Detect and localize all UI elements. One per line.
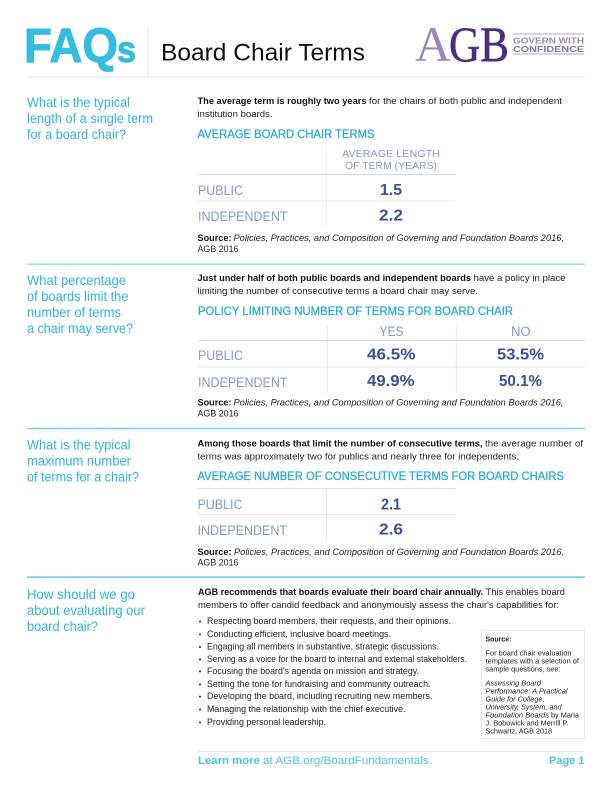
source box — [482, 630, 584, 738]
title: FAQs: s — [117, 29, 136, 70]
bullet list: evaluation capabilities: Developing the board, including recruiting new members. — [207, 691, 432, 701]
source 2: AGB 2016 — [198, 409, 239, 419]
source box: Foundation Boards — [486, 711, 549, 720]
chart heading 2: POLICY LIMITING NUMBER OF TERMS FOR BOARD CHAIR — [198, 305, 513, 318]
answer text 1: The average term is roughly two years — [198, 96, 366, 107]
answer text 3: terms was approximately two for publics and nearly three for independents. — [198, 452, 519, 463]
chart heading 3: AVERAGE NUMBER OF CONSECUTIVE TERMS FOR BOARD CHAIRS — [198, 470, 564, 483]
table: average number of consecutive terms: 2.6 — [379, 522, 403, 539]
learn more link text: Learn more — [198, 755, 260, 767]
answer text 2: limiting the number of consecutive terms a board chair may serve. — [198, 286, 478, 297]
source box: templates with a selection of — [486, 657, 580, 666]
table: average board chair terms: AVERAGE LENGTH — [342, 148, 440, 160]
table: policy limiting number of terms: PUBLIC — [198, 348, 243, 363]
answer text 3 — [198, 439, 583, 463]
answer text 4: This enables board — [486, 587, 565, 598]
source box: For board chair evaluation — [486, 649, 572, 658]
answer text 4: members to offer candid feedback and anonymously assess the chair's capabilities for: — [198, 600, 559, 611]
question 2 — [27, 273, 133, 336]
question 4 — [27, 587, 145, 634]
bullet list: evaluation capabilities — [199, 616, 467, 727]
title: Board Chair Terms: Board Chair Terms — [161, 40, 365, 66]
panel: term limit policy — [27, 273, 585, 419]
panel: term length — [27, 95, 564, 254]
source 1: Policies, Practices, and Composition of Governing and Foundation Boards 2016, — [234, 233, 564, 243]
question 1: for a board chair? — [27, 127, 126, 142]
table: policy limiting number of terms: NO — [511, 324, 530, 339]
question 2: number of terms — [27, 305, 121, 320]
source box: Guide for College, — [486, 695, 544, 704]
answer text 1: institution boards. — [198, 109, 272, 120]
table: average board chair terms: 2.2 — [379, 208, 403, 225]
answer text 3: Among those boards that limit the number of consecutive terms, — [198, 439, 482, 450]
table: average number of consecutive terms: INDEPENDENT — [198, 523, 287, 538]
source 2 — [198, 398, 564, 419]
source 1 — [198, 233, 564, 254]
table: average board chair terms: 1.5 — [380, 182, 402, 199]
title: FAQs: FAQ — [24, 19, 118, 73]
source 3 — [198, 547, 564, 568]
table: average board chair terms: OF TERM (YEARS) — [345, 160, 437, 172]
source 3: AGB 2016 — [198, 558, 239, 568]
source 1: Source: — [198, 233, 232, 243]
answer text 4: AGB recommends that boards evaluate their board chair annually. — [198, 587, 483, 598]
logo: AGB Govern with Confidence — [415, 16, 584, 72]
question 3: of terms for a chair? — [27, 470, 139, 485]
logo: AGB Govern with Confidence: CONFIDENCE — [513, 44, 584, 54]
question 4: How should we go — [27, 587, 135, 602]
table: average board chair terms: PUBLIC — [198, 183, 243, 198]
table: average number of consecutive terms — [198, 488, 456, 541]
question 1 — [27, 95, 153, 142]
source box: University, System, and — [486, 703, 562, 712]
page number: Page 1 — [549, 755, 584, 767]
answer text 3: the average number of — [485, 439, 583, 450]
chart heading 1: AVERAGE BOARD CHAIR TERMS — [198, 128, 375, 141]
answer text 1 — [198, 96, 562, 120]
table: average board chair terms — [198, 147, 456, 227]
panel: maximum number of terms — [27, 438, 583, 568]
learn more link text — [198, 755, 432, 767]
question 3: What is the typical — [27, 438, 130, 452]
bullet list: evaluation capabilities: Conducting efficient, inclusive board meetings. — [207, 629, 391, 639]
panel: evaluating the board chair — [27, 587, 584, 738]
source 3: Source: — [198, 547, 232, 557]
source 1: AGB 2016 — [198, 244, 239, 254]
source 2: Source: — [198, 398, 232, 408]
answer text 4 — [198, 587, 565, 611]
question 4: board chair? — [27, 619, 98, 634]
source 2: Policies, Practices, and Composition of Governing and Foundation Boards 2016, — [234, 398, 564, 408]
table: policy limiting number of terms — [198, 324, 585, 393]
bullet list: evaluation capabilities: Setting the tone for fundraising and community outreach. — [207, 679, 430, 689]
source box: Assessing Board — [485, 679, 542, 688]
answer text 2 — [198, 273, 566, 297]
source 3: Policies, Practices, and Composition of Governing and Foundation Boards 2016, — [234, 547, 564, 557]
table: policy limiting number of terms: 53.5% — [497, 346, 544, 363]
logo: AGB Govern with Confidence: GB — [449, 16, 509, 72]
question 1: length of a single term — [27, 111, 153, 126]
source box: by Maria — [551, 711, 580, 720]
source box: Source: — [486, 635, 512, 644]
table: policy limiting number of terms: INDEPENDENT — [198, 375, 288, 390]
learn more link text: at AGB.org/BoardFundamentals. — [263, 755, 432, 767]
header — [24, 16, 585, 78]
question 2: a chair may serve? — [27, 321, 133, 336]
question 2: What percentage — [27, 273, 126, 288]
source box: sample questions, see: — [486, 665, 560, 674]
question 3: maximum number — [27, 454, 131, 469]
answer text 1: for the chairs of both public and independent — [369, 96, 562, 107]
answer text 2: have a policy in place — [474, 273, 566, 284]
footer — [198, 751, 584, 767]
question 4: about evaluating our — [27, 603, 145, 618]
table: policy limiting number of terms: 50.1% — [499, 373, 542, 390]
logo: AGB Govern with Confidence: A — [415, 16, 451, 72]
question 3 — [27, 438, 139, 485]
question 1: What is the typical — [27, 95, 130, 110]
question 2: of boards limit the — [27, 289, 129, 304]
source box: Schwartz, AGB 2018 — [486, 727, 552, 736]
source box: Performance: A Practical — [486, 687, 568, 696]
table: average board chair terms: INDEPENDENT — [198, 209, 288, 224]
bullet list: evaluation capabilities: Providing personal leadership. — [207, 717, 326, 727]
bullet list: evaluation capabilities: Focusing the board's agenda on mission and strategy. — [207, 666, 419, 676]
bullet list: evaluation capabilities: Managing the relationship with the chief executive. — [207, 704, 406, 714]
answer text 2: Just under half of both public boards and independent boards — [198, 273, 471, 284]
table: average number of consecutive terms: PUBLIC — [198, 497, 243, 512]
bullet list: evaluation capabilities: Serving as a voice for the board to internal and external stakeholders. — [207, 654, 467, 664]
table: policy limiting number of terms: YES — [380, 324, 404, 339]
table: average number of consecutive terms: 2.1 — [381, 496, 401, 513]
logo: AGB Govern with Confidence: GOVERN WITH — [513, 36, 584, 46]
bullet list: evaluation capabilities: Respecting board members, their requests, and their opinions. — [207, 616, 451, 626]
table: policy limiting number of terms: 49.9% — [367, 373, 414, 390]
table: policy limiting number of terms: 46.5% — [367, 346, 416, 363]
bullet list: evaluation capabilities: Engaging all members in substantive, strategic discussions. — [207, 641, 439, 651]
source box: J. Bobowick and Merrill P. — [486, 719, 568, 728]
